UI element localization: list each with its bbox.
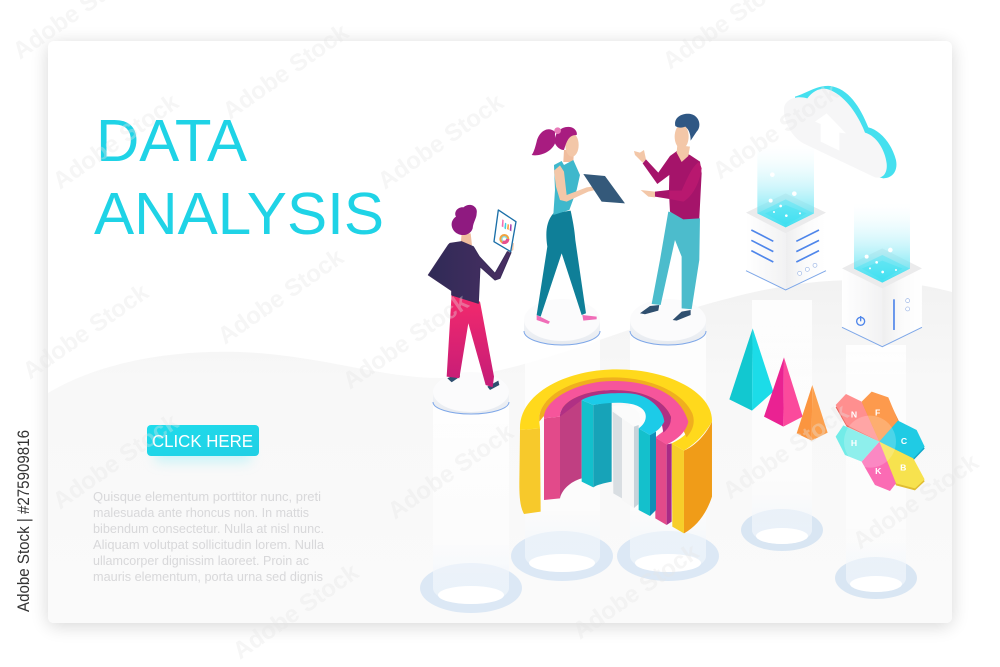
tube base rings [420, 509, 917, 613]
body text: Quisque elementum porttitor nunc, preti [93, 490, 321, 504]
watermark: Adobe Stock [228, 558, 364, 665]
hexagon petal chart: K [875, 466, 882, 476]
body text: malesuada ante rhoncus non. In mattis [93, 506, 309, 520]
circular layered chart [519, 369, 712, 533]
background wave [48, 280, 952, 623]
watermark: Adobe Stock [848, 448, 984, 555]
person: man with tablet [428, 205, 516, 390]
hexagon petal chart: B [900, 463, 906, 473]
title: ANALYSIS [94, 181, 384, 247]
title [94, 108, 384, 247]
watermark: Adobe Stock [48, 408, 184, 515]
cloud upload icon [784, 86, 896, 178]
watermark: Adobe Stock [18, 278, 154, 385]
body text: bibendum consectetur. Nulla at nisl nunc. [93, 522, 324, 536]
button: click here: CLICK HERE [152, 431, 253, 451]
hexagon petal chart [836, 392, 925, 491]
tablet with chart [494, 210, 516, 252]
body text: mauris elementum, porta urna sed dignis [93, 570, 323, 584]
white core [612, 405, 640, 427]
person: man gesturing [634, 114, 702, 321]
cyan ring [582, 400, 593, 487]
body text [93, 490, 324, 584]
watermark: Adobe Stock [213, 243, 349, 350]
watermark: Adobe Stock [373, 88, 509, 195]
body text: ullamcorper dignissim laoreet. Proin ac [93, 554, 309, 568]
hexagon petal chart: F [875, 408, 880, 418]
hexagon petal chart: H [851, 438, 857, 448]
person: woman with laptop [532, 127, 625, 324]
hexagon petal chart: N [851, 410, 857, 420]
hexagon petal chart: C [901, 436, 908, 446]
server cube with data glow [746, 145, 826, 290]
yellow outer ring [519, 428, 541, 514]
watermark: Adobe Stock [48, 88, 184, 195]
button: click here [147, 425, 259, 462]
title: DATA [96, 108, 248, 174]
watermark: Adobe Stock [568, 538, 704, 645]
pink ring [544, 417, 560, 500]
platforms [433, 299, 706, 414]
watermark: Adobe Stock [383, 418, 519, 525]
power cube with data glow [842, 203, 922, 347]
watermark: Adobe Stock [338, 288, 474, 395]
card shadow [48, 44, 952, 626]
watermark: Adobe Stock [218, 18, 354, 125]
glass tubes [433, 300, 906, 604]
pyramids [729, 328, 828, 441]
body text: Aliquam volutpat sollicitudin lorem. Nulla [93, 538, 324, 552]
watermark: Adobe Stock [708, 78, 844, 185]
panel: landing page card [48, 41, 952, 623]
stock id caption: Adobe Stock | #275909816 [14, 430, 33, 612]
watermark: Adobe Stock [718, 398, 854, 505]
upload arrow [815, 113, 846, 151]
power symbol [857, 316, 865, 325]
